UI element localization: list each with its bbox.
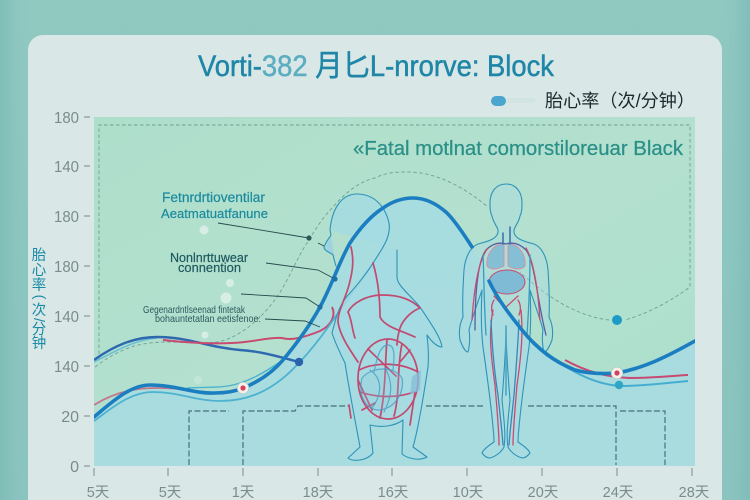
callout 1: Fetnrdrtioventilar (162, 190, 266, 205)
markers (237, 315, 623, 394)
liver (489, 270, 525, 294)
main heart-rate curve (94, 198, 695, 417)
blue area under curve (94, 198, 695, 466)
y axis: 180 (54, 209, 79, 226)
callout 2: Nonlnrttuwear (170, 251, 248, 265)
soft white spots (194, 226, 234, 384)
y axis: 140 (54, 159, 79, 176)
y axis: 0 (70, 459, 79, 476)
dashed steps (189, 406, 665, 465)
y axis title: ( (31, 295, 47, 300)
y axis: 20 (61, 409, 79, 426)
dashed region outline (95, 125, 690, 367)
callout 3: Gegenardntlseenad fintetak (143, 304, 246, 316)
illustration: side figure (324, 194, 442, 460)
y axis title: / (30, 318, 46, 323)
lungs (487, 243, 504, 269)
body outline (459, 184, 553, 458)
leader lines (218, 223, 335, 327)
y axis title: 次 (32, 302, 46, 319)
fetus (361, 345, 421, 412)
upper blue line (94, 338, 157, 362)
callout 2: connention (178, 260, 241, 275)
red line lower left (94, 388, 190, 405)
legend: 胎心率（次/分钟） (545, 91, 695, 111)
x axis (87, 468, 709, 500)
vessels (472, 227, 546, 445)
y axis title: 分 (32, 321, 46, 338)
y axis: 180 (54, 110, 79, 127)
y axis title: 钟 (32, 335, 46, 352)
y axis title: 率 (32, 277, 46, 294)
callout 3 (143, 304, 261, 325)
chart subtitle: «Fatal motlnat comorstiloreuar Black (353, 138, 684, 160)
red line upper (163, 307, 334, 343)
fetal vessels (338, 247, 420, 425)
chart plot area (94, 117, 695, 466)
callout 3: bohauntetatlan eetisfenoe: (155, 313, 261, 325)
callout 1: Aeatmatuatfanune (161, 206, 268, 221)
y axis: 140 (54, 359, 79, 376)
light blue line lower (94, 262, 375, 421)
title: Vorti-382 月匕L-nrorve: Block (198, 50, 555, 83)
illustration: front figure (459, 184, 553, 458)
y axis title (30, 247, 47, 352)
callout 2 (170, 251, 248, 275)
y axis title: 胎 (32, 247, 47, 264)
right-hand lines (534, 342, 688, 386)
y axis title: 心 (32, 262, 46, 279)
y axis (54, 110, 90, 476)
callout 1 (161, 190, 268, 221)
y axis: 180 (54, 259, 79, 276)
y axis: 140 (54, 309, 79, 326)
leader dots (306, 235, 338, 310)
